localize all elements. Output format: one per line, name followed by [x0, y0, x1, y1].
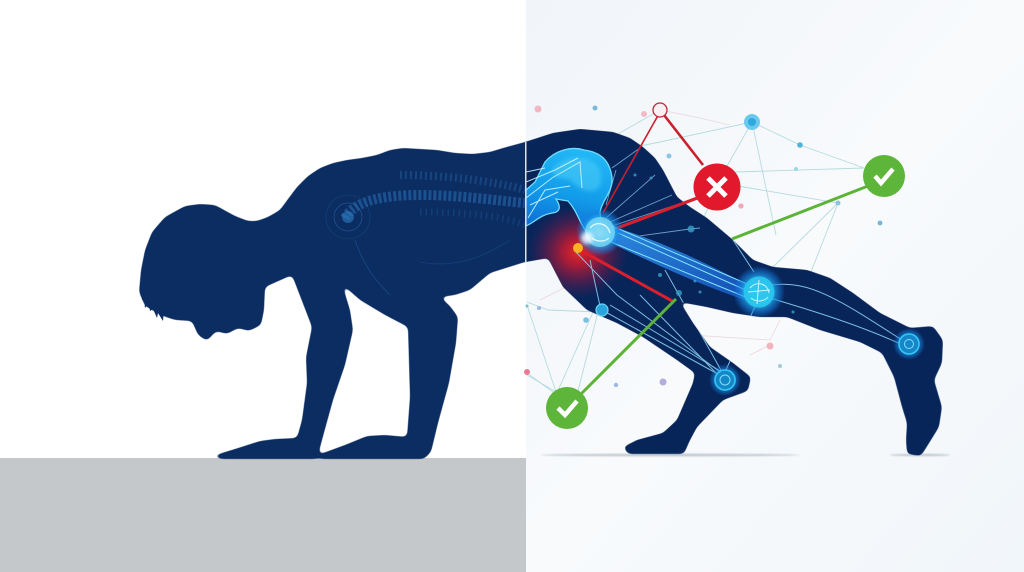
joint: knee	[733, 266, 785, 318]
joint: front ankle	[709, 364, 741, 396]
joint: rear ankle	[893, 328, 925, 360]
node: upper blue	[744, 114, 760, 130]
floor shadows on right panel	[540, 454, 950, 456]
darker navy leg tone	[526, 120, 956, 465]
small particles	[634, 174, 794, 314]
badge: red cross	[694, 164, 740, 210]
anatomy overlay: glowing skeleton and nerves	[526, 120, 956, 465]
background: right pale analysis panel	[526, 0, 1024, 572]
network: background connection lines and nodes	[524, 106, 882, 400]
lower leg nerve lines	[574, 240, 905, 378]
callout line: red hip to top ring	[603, 103, 703, 213]
network nodes	[524, 106, 882, 387]
center divider	[525, 142, 526, 262]
callout line: green to upper check	[732, 186, 868, 239]
spine x-ray on left half	[326, 175, 525, 295]
badge: upper green check	[863, 155, 905, 197]
figure: dark navy plank silhouette	[139, 129, 943, 459]
callout line: red from pain point along thigh	[580, 250, 674, 302]
joint: pain point	[573, 243, 583, 253]
background: left white panel	[0, 0, 526, 572]
hip bone	[526, 148, 612, 234]
callout line: green to lower check	[581, 299, 676, 394]
floor block	[0, 458, 526, 572]
joint: hip	[576, 208, 624, 256]
callout line: red from X badge to hip	[617, 197, 700, 228]
joint: small thigh node	[596, 304, 608, 316]
pain glow	[531, 209, 625, 296]
femur beam	[605, 226, 750, 300]
hip radial nerve lines	[606, 148, 700, 240]
badge: lower green check	[546, 387, 588, 429]
hair spikes	[141, 275, 175, 321]
